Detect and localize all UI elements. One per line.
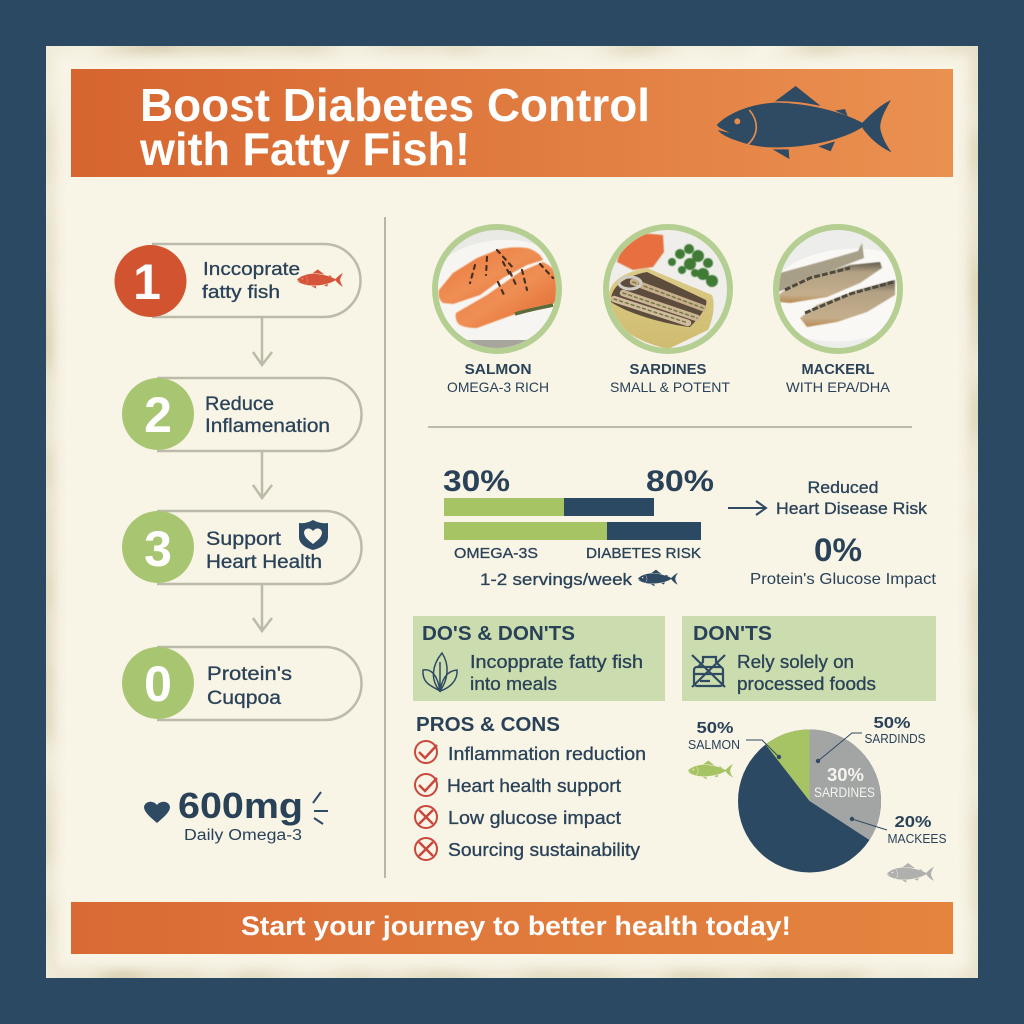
label: sardinds: 50% (874, 715, 910, 732)
icon: green fish (688, 761, 733, 779)
arrow (728, 501, 766, 515)
footer banner: Start your journey to better health today! (241, 911, 791, 941)
panel: bar chart: DIABETES RISK (586, 546, 701, 562)
panel: pros and cons (415, 714, 646, 860)
panel: bar chart: 30% (443, 465, 510, 498)
title: Boost Diabetes Control (140, 79, 650, 131)
panel: bar chart (443, 465, 714, 589)
arrow 3 to 4 (253, 584, 272, 631)
header banner (71, 69, 953, 177)
panel: don'ts: processed foods (737, 674, 876, 694)
footer banner (71, 902, 953, 954)
mackerel label: MACKERL (802, 362, 875, 378)
panel: pie chart: SARDINES (814, 785, 875, 800)
mackerel label: WITH EPA/DHA (786, 379, 891, 395)
icon: grey fish (887, 863, 934, 883)
step 3 (122, 511, 362, 584)
sardines label (610, 362, 730, 395)
label: salmon: 50% (696, 720, 734, 737)
stat: glucose impact: 0% (814, 532, 862, 568)
panel: do's: DO'S & DON'TS (422, 623, 575, 645)
callout: heart disease risk (728, 478, 928, 518)
title: with Fatty Fish! (139, 123, 470, 175)
panel: bar chart: 1-2 servings/week (480, 571, 633, 589)
bar two (444, 522, 701, 540)
bar one (444, 498, 654, 516)
step 1 (114, 244, 360, 317)
mackerel photo (773, 224, 903, 354)
stat: glucose impact: Protein's Glucose Impact (750, 571, 937, 588)
grey slice (810, 730, 881, 840)
icon: small fish (638, 570, 678, 586)
panel: don'ts: Rely solely on (737, 652, 854, 672)
panel: bar chart: 80% (646, 465, 714, 498)
daily omega-3 stat: Daily Omega-3 (184, 827, 302, 844)
salmon label: SALMON (464, 362, 532, 378)
panel: do's: into meals (470, 674, 557, 694)
step 2: 2 (144, 387, 172, 443)
panel: do's (413, 616, 665, 701)
mackerel label (786, 362, 891, 395)
arrow 1 to 2 (253, 318, 272, 365)
panel: don'ts: DON'TS (693, 623, 772, 645)
step 4: Cuqpoa (207, 688, 281, 709)
icon: shield (299, 520, 328, 550)
daily omega-3 stat (144, 785, 328, 844)
salmon photo (432, 224, 562, 354)
step 1: fatty fish (202, 281, 280, 302)
label: mackees: 20% (894, 814, 932, 831)
salmon label (447, 362, 549, 395)
label: salmon (688, 720, 740, 752)
panel: fish types (420, 224, 929, 395)
con item: Sourcing sustainability (448, 840, 640, 860)
pro item (415, 741, 646, 764)
step 4: 0 (144, 656, 172, 712)
arrow 2 to 3 (253, 451, 272, 498)
salmon label: OMEGA-3 RICH (447, 379, 549, 395)
label: sardinds: SARDINDS (864, 732, 926, 746)
sardines photo (603, 224, 733, 354)
sardines label: SARDINES (630, 362, 707, 378)
step 4 (122, 647, 362, 720)
navy slice (738, 730, 881, 872)
icon: leaves (423, 653, 457, 691)
sardines label: SMALL & POTENT (610, 379, 730, 395)
panel: pros and cons: PROS & CONS (416, 714, 560, 736)
panel: don'ts (682, 616, 936, 701)
pro item: Inflammation reduction (448, 744, 646, 764)
step 3: 3 (144, 521, 172, 577)
con item: Low glucose impact (448, 808, 621, 828)
panel: pie chart (688, 715, 946, 883)
panel: do's: Incopprate fatty fish (470, 652, 643, 672)
panel: pie chart: 30% (827, 764, 864, 785)
step 3: Heart Health (206, 552, 322, 573)
daily omega-3 stat: 600mg (178, 785, 303, 826)
icon: crossed food jar (692, 655, 725, 687)
pro item: Heart health support (447, 776, 621, 796)
step 3: Support (206, 529, 282, 550)
label: mackees: MACKEES (888, 832, 946, 846)
step 2: Inflamenation (205, 416, 330, 437)
title (139, 79, 650, 175)
callout: heart disease risk: Heart Disease Risk (776, 499, 928, 518)
label: salmon: SALMON (688, 738, 740, 752)
vertical divider (384, 217, 386, 878)
stat: glucose impact (750, 532, 937, 588)
icon: heart (144, 802, 170, 823)
step 4: Protein's (207, 664, 292, 685)
con item (415, 806, 621, 828)
panel: steps flow (114, 244, 362, 720)
horizontal divider (428, 426, 912, 428)
panel: bar chart: OMEGA-3S (454, 546, 538, 562)
step 2 (122, 378, 362, 451)
green slice (766, 729, 810, 801)
leader lines (746, 733, 887, 830)
label: sardinds (864, 715, 926, 746)
icon: header fish (717, 86, 892, 159)
step 1: 1 (133, 254, 161, 310)
callout: heart disease risk: Reduced (808, 478, 878, 497)
step 1: Inccoprate (203, 258, 300, 279)
label: mackees (888, 814, 946, 846)
step 2: Reduce (205, 394, 274, 415)
